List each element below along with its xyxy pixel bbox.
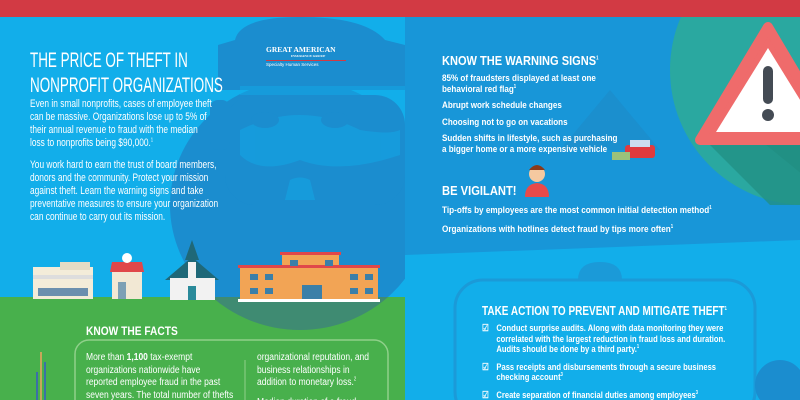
- facts text column 2: [257, 352, 369, 400]
- intro text: can be massive. Organizations lose up to 5% of: [30, 111, 207, 123]
- intro text: You work hard to earn the trust of board members,: [30, 159, 216, 171]
- take action: ☑: [482, 323, 489, 334]
- take action: ☑: [482, 362, 489, 372]
- take action: TAKE ACTION TO PREVENT AND MITIGATE THEFT1: [482, 304, 727, 318]
- intro text: can continue to carry out its mission.: [30, 211, 165, 223]
- logo: INSURANCE GROUP: [291, 54, 325, 58]
- take action: checking account3: [496, 372, 563, 383]
- facts text: organizations nationwide have: [86, 364, 200, 376]
- take action: correlated with the largest reduction in fraud loss and duration.: [496, 334, 725, 344]
- logo: Specialty Human Services: [266, 62, 319, 67]
- title: [30, 49, 223, 97]
- title: THE PRICE OF THEFT IN: [30, 49, 188, 72]
- logo: GREAT AMERICAN: [266, 45, 336, 54]
- logo: [266, 45, 346, 67]
- facts text column 2: organizational reputation, and: [257, 352, 369, 363]
- facts text: [86, 352, 233, 400]
- be vigilant: BE VIGILANT!: [442, 183, 517, 198]
- intro text: preventative measures to ensure your organization: [30, 198, 218, 210]
- buildings: [33, 240, 380, 302]
- right panel: [405, 17, 800, 255]
- facts box: [75, 340, 388, 400]
- intro text: [30, 98, 218, 223]
- be vigilant: Organizations with hotlines detect fraud by tips more often1: [442, 224, 673, 235]
- facts text: reported employee fraud in the past: [86, 377, 220, 388]
- warning signs: Choosing not to go on vacations: [442, 116, 568, 128]
- facts text column 2: business relationships in: [257, 364, 350, 376]
- person: [525, 165, 549, 197]
- intro text: against theft. Learn the warning signs and take: [30, 185, 203, 197]
- car: [612, 140, 655, 160]
- facts text: More than 1,100 tax-exempt: [86, 352, 192, 363]
- warning signs: KNOW THE WARNING SIGNS1: [442, 53, 598, 68]
- take action: [482, 304, 727, 400]
- take action: Audits should be done by a third party.1: [496, 344, 639, 355]
- take action: Pass receipts and disbursements through a secure business: [496, 362, 716, 372]
- warning signs: 85% of fraudsters displayed at least one: [442, 73, 596, 84]
- take action: Conduct surprise audits. Along with data monitoring they were: [496, 323, 723, 334]
- thief silhouette: [170, 17, 405, 297]
- warning signs: [442, 53, 617, 154]
- intro text: their annual revenue to fraud with the median: [30, 124, 198, 136]
- icon: warning triangle: [700, 27, 800, 140]
- title: NONPROFIT ORGANIZATIONS: [30, 74, 223, 97]
- be vigilant: Tip-offs by employees are the most common initial detection method1: [442, 205, 712, 216]
- clipboard: [455, 280, 755, 400]
- intro text: Even in small nonprofits, cases of employee theft: [30, 98, 212, 110]
- warning signs: Abrupt work schedule changes: [442, 100, 562, 111]
- be vigilant: [442, 183, 712, 235]
- top red bar: [0, 0, 800, 17]
- warning signs: behavioral red flag1: [442, 83, 516, 94]
- intro text: donors and the community. Protect your mission: [30, 172, 208, 184]
- ground: [0, 297, 405, 400]
- warning signs: a bigger home or a more expensive vehicle: [442, 144, 607, 154]
- warning signs: Sudden shifts in lifestyle, such as purchasing: [442, 133, 617, 144]
- heading: know the facts: KNOW THE FACTS: [86, 324, 178, 338]
- intro text: loss to nonprofits being $90,000.1: [30, 137, 153, 149]
- facts text column 2: addition to monetary loss.2: [257, 377, 356, 388]
